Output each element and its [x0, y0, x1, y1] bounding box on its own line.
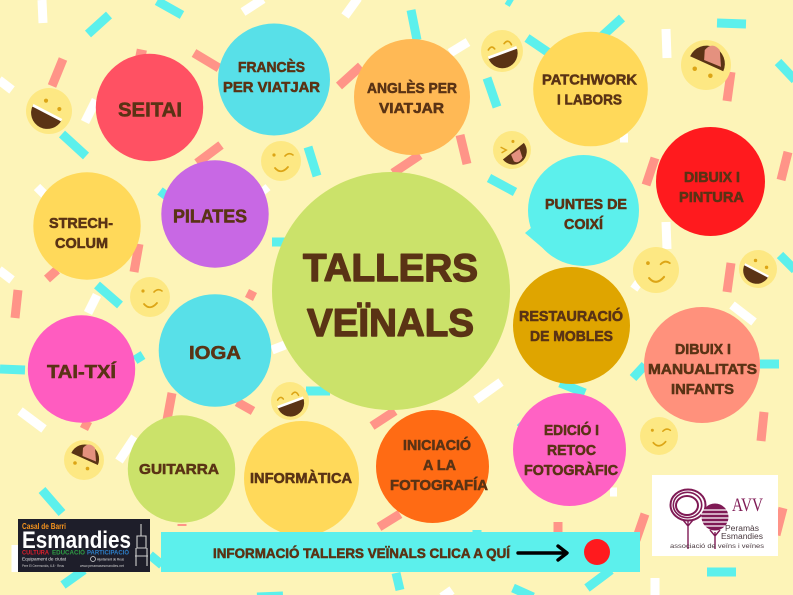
logo: AVV Peramàs Esmandies: Esmandies	[721, 532, 763, 541]
icon: tongue wink face	[493, 131, 531, 169]
bubble: Restauració de mobles	[513, 267, 630, 384]
bubble: Tai-txí	[28, 315, 135, 423]
logo: AVV Peramàs Esmandies: Peramàs	[725, 524, 759, 533]
bubble: Dibuix i pintura	[656, 127, 765, 236]
bubble: Anglès per viatjar	[354, 39, 470, 155]
bubble: Informàtica: INFORMÀTICA	[250, 470, 353, 487]
bubble: Pilates	[161, 160, 269, 268]
logo: Casal de Barri Esmandies: Esmandies	[22, 527, 131, 554]
bubble: Dibuix i pintura: DIBUIX I	[684, 170, 740, 186]
bubble: Restauració de mobles: RESTAURACIÓ	[519, 307, 623, 325]
logo: Casal de Barri Esmandies: www.peramasesmandies.net	[80, 564, 124, 568]
icon: winking face	[130, 277, 170, 317]
logo: Casal de Barri Esmandies: Pere El Ceremoniós, 6-8 · Reus	[22, 564, 64, 568]
bubble: Dibuix i manualitats infants: INFANTS	[671, 382, 734, 398]
icon: winking face	[633, 247, 679, 293]
bubble: Strech-colum: COLUM	[55, 236, 108, 252]
logo: Casal de Barri Esmandies: CULTURA	[22, 550, 50, 556]
bubble: Tallers veïnals: VEÏNALS	[307, 302, 474, 345]
bubble: Seitai	[96, 54, 203, 161]
logo: Casal de Barri Esmandies: Casal de Barri	[22, 521, 66, 531]
bubble: Strech-colum: STRECH-	[49, 216, 113, 232]
bubble: Puntes de coixí	[525, 155, 639, 266]
bubble: Tallers veïnals	[272, 172, 510, 410]
bubble: Restauració de mobles: DE MOBLES	[530, 329, 613, 345]
bubble: Guitarra	[128, 415, 235, 523]
bubble: Ioga	[159, 294, 271, 407]
bubble: Dibuix i manualitats infants	[644, 307, 760, 423]
bubble: Strech-colum	[33, 172, 141, 280]
bubble: Iniciació a la fotografía: INICIACIÓ	[403, 436, 471, 454]
bubble: Edició i retoc fotogràfic: EDICIÓ I	[544, 421, 599, 439]
bubble: Ioga: IOGA	[189, 343, 241, 363]
bubble: Edició i retoc fotogràfic: RETOC	[547, 443, 597, 459]
icon: laughing face	[481, 30, 523, 72]
bubble: Seitai: SEITAI	[118, 100, 182, 122]
bubble: Iniciació a la fotografía: FOTOGRAFÍA	[390, 477, 489, 494]
logo: Casal de Barri Esmandies: EDUCACIÓ	[52, 548, 85, 556]
bubble: Puntes de coixí: COIXÍ	[564, 216, 604, 233]
bubble: Anglès per viatjar: ANGLÈS PER	[367, 80, 458, 97]
bubble: Guitarra: GUITARRA	[139, 462, 220, 478]
bubble: Edició i retoc fotogràfic: FOTOGRÀFIC	[524, 462, 619, 479]
logo: Casal de Barri Esmandies: PARTICIPACIÓ	[87, 548, 129, 556]
icon: winking face	[640, 417, 678, 455]
bubble: Iniciació a la fotografía: A LA	[423, 458, 457, 474]
banner: informació	[161, 532, 640, 572]
bubble: Iniciació a la fotografía	[376, 410, 489, 523]
logo: Casal de Barri Esmandies: Ajuntament de Reus	[97, 558, 124, 562]
confetti: salmon	[15, 53, 788, 540]
icon: laughing face	[739, 250, 777, 288]
bubble: Francès per viatjar: FRANCÈS	[238, 59, 305, 76]
bubble: Dibuix i pintura: PINTURA	[679, 190, 745, 206]
icon: tongue face	[681, 40, 731, 90]
logo: AVV Peramàs Esmandies: AVV	[732, 495, 763, 516]
icon: laughing face	[271, 382, 309, 420]
logo: AVV Peramàs Esmandies: associació de veïns i veïnes	[670, 544, 764, 550]
logo: Casal de Barri Esmandies	[18, 519, 150, 572]
bubble: Patchwork i labors: I LABORS	[557, 92, 622, 108]
bubble: Patchwork i labors: PATCHWORK	[542, 72, 638, 88]
logo: AVV Peramàs Esmandies	[652, 475, 778, 556]
bubble: Tai-txí: TAI-TXÍ	[47, 361, 117, 382]
bubble: Puntes de coixí: PUNTES DE	[545, 197, 627, 213]
icon: laughing face	[26, 88, 72, 134]
bubble: Edició i retoc fotogràfic	[513, 393, 626, 506]
bubble: Dibuix i manualitats infants: MANUALITATS	[648, 362, 757, 378]
bubble: Patchwork i labors	[533, 32, 648, 146]
bubble: Anglès per viatjar: VIATJAR	[379, 101, 445, 117]
bubble: Dibuix i manualitats infants: DIBUIX I	[675, 342, 731, 358]
icon: tongue face	[64, 440, 104, 480]
bubble: Informàtica	[244, 421, 359, 536]
bubble: Pilates: PILATES	[173, 206, 247, 226]
logo: Casal de Barri Esmandies: Equipament de ciutat	[22, 556, 67, 562]
bubble: Francès per viatjar: PER VIATJAR	[223, 80, 321, 96]
banner: informació: INFORMACIÓ TALLERS VEÏNALS CLICA A QUÍ	[213, 546, 511, 561]
icon: winking face	[261, 141, 301, 181]
bubble: Tallers veïnals: TALLERS	[303, 247, 478, 290]
bubble: Francès per viatjar	[218, 24, 330, 136]
